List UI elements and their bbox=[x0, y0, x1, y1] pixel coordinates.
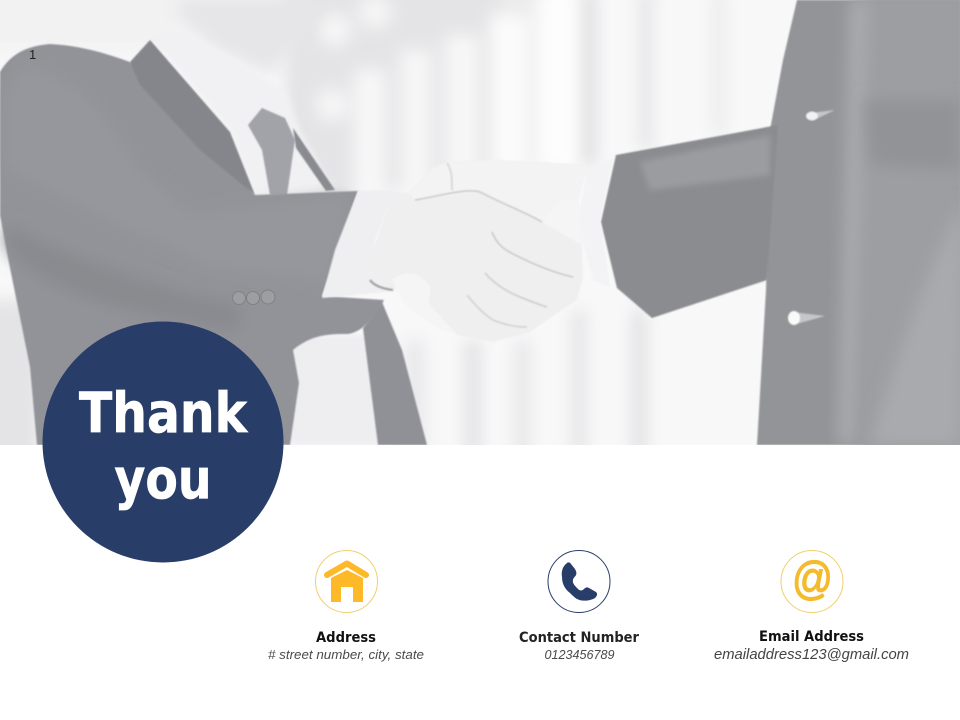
circle badge: Thank you bbox=[42, 322, 284, 562]
clasped hands bbox=[370, 160, 587, 342]
left figure: face and shirt bbox=[150, 0, 427, 445]
circle badge: Thank you: Thank bbox=[79, 381, 248, 445]
label: contact number: Contact Number bbox=[519, 630, 639, 646]
text: street: # street number, city, state bbox=[268, 647, 424, 662]
tie bbox=[248, 108, 295, 195]
right sleeve bbox=[601, 125, 778, 318]
sleeve buttons bbox=[232, 290, 275, 304]
icon: phone bbox=[548, 550, 610, 612]
icon: at sign: @ bbox=[792, 552, 833, 604]
icon: house bbox=[316, 550, 378, 612]
left shirt cuff bbox=[322, 190, 395, 298]
text: phone number: 0123456789 bbox=[544, 648, 615, 662]
right coat buttons bbox=[788, 110, 835, 325]
right shirt cuff bbox=[600, 222, 601, 223]
blurred window background bbox=[0, 0, 654, 445]
left figure: jacket and sleeve bbox=[0, 40, 395, 445]
slide number: 1 bbox=[29, 47, 36, 62]
contact: phone bbox=[519, 550, 639, 662]
photo: business handshake bbox=[0, 0, 960, 470]
text: email: emailaddress123@gmail.com bbox=[714, 646, 909, 663]
icon: at sign bbox=[781, 550, 843, 612]
circle badge: Thank you: you bbox=[114, 447, 212, 511]
contact: email bbox=[714, 550, 909, 663]
label: address: Address bbox=[316, 630, 376, 646]
label: email address: Email Address bbox=[759, 629, 864, 645]
contact: address bbox=[268, 550, 424, 662]
right figure: jacket and sleeve bbox=[578, 0, 960, 455]
